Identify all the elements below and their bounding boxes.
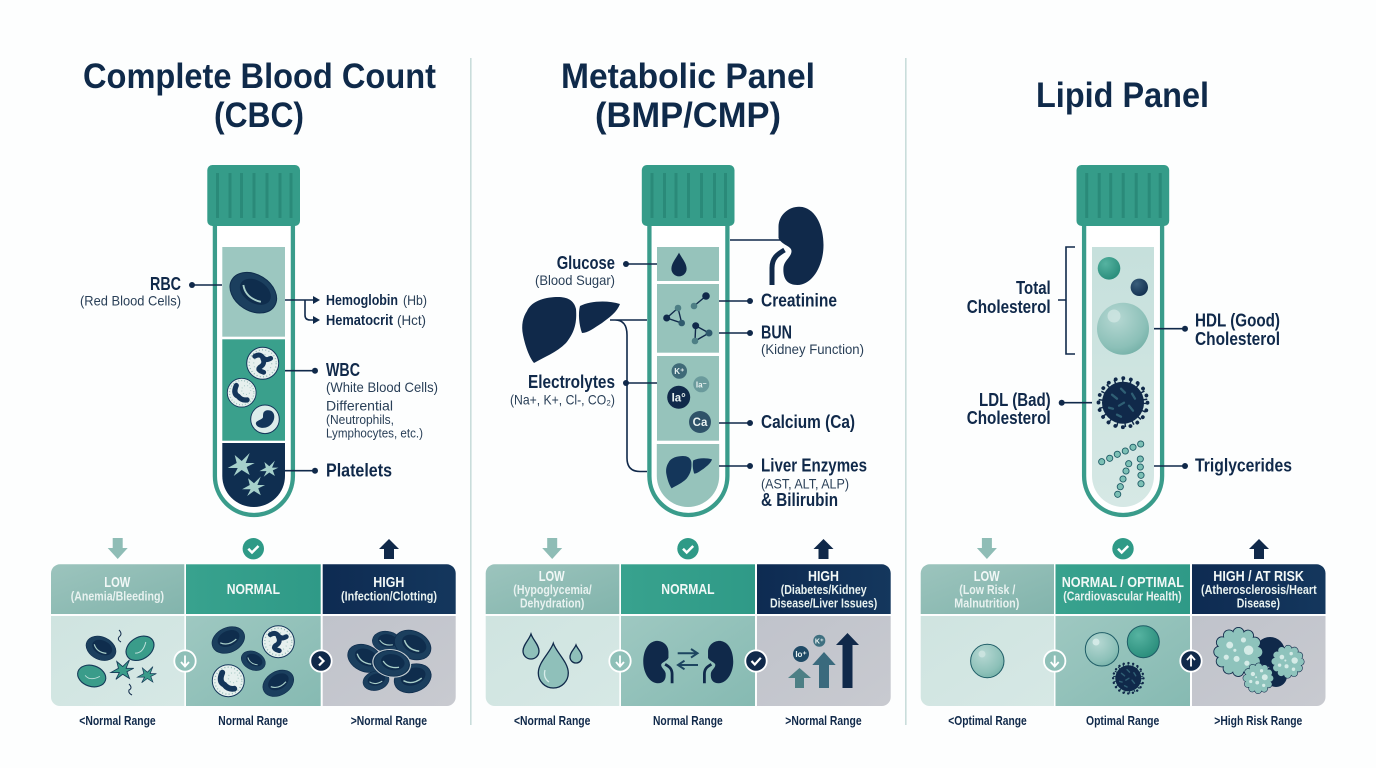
cell header: normal bbox=[186, 564, 321, 614]
cell: low illustration bbox=[486, 616, 619, 706]
cell: normal illustration bbox=[186, 616, 321, 706]
heading: metabolic panel: (BMP/CMP) bbox=[595, 96, 781, 135]
test tube: lipid bbox=[1076, 165, 1169, 515]
label: glucose bbox=[535, 253, 657, 288]
tube fill bbox=[1092, 247, 1154, 507]
label: WBC: WBC bbox=[326, 360, 360, 380]
organ connector lines bbox=[610, 240, 782, 472]
icon: kidney bbox=[772, 207, 824, 285]
connector: low to normal bbox=[1044, 650, 1065, 672]
cell header: normal bbox=[621, 564, 755, 614]
cell header: normal: (Cardiovascular Health) bbox=[1063, 590, 1182, 604]
label: WBC: Lymphocytes, etc.) bbox=[326, 426, 423, 440]
range labels: >High Risk Range bbox=[1214, 714, 1302, 728]
cell: high illustration: K⁺ bbox=[815, 638, 824, 645]
cell header: low bbox=[486, 564, 619, 614]
tube layer: electrolytes bbox=[657, 356, 719, 441]
connector: normal to high bbox=[1180, 650, 1202, 672]
label: hemoglobin and hematocrit with arrows bbox=[285, 292, 427, 329]
cell: high illustration: Io⁺ bbox=[795, 650, 807, 659]
status icon: normal check bbox=[243, 538, 264, 559]
status arrow: high bbox=[814, 539, 834, 559]
tube layer: white cells bbox=[222, 339, 285, 441]
cell: normal illustration bbox=[1056, 616, 1190, 706]
cell header: high: (Atherosclerosis/Heart bbox=[1201, 583, 1317, 597]
divider: left bbox=[470, 58, 472, 725]
connector: low to normal bbox=[609, 650, 631, 672]
cell header: high bbox=[1192, 564, 1326, 614]
cell header: high: HIGH / AT RISK bbox=[1213, 568, 1304, 585]
label: RBC: (Red Blood Cells) bbox=[80, 292, 181, 308]
label: glucose: Glucose bbox=[557, 253, 615, 273]
status arrow: high bbox=[379, 539, 399, 559]
label: hemoglobin and hematocrit with arrows: (Hct) bbox=[397, 312, 426, 328]
cell: normal illustration bbox=[621, 616, 755, 706]
label: BUN bbox=[719, 323, 864, 357]
label: HDL bbox=[1154, 311, 1280, 349]
test tube: metabolic bbox=[642, 165, 734, 515]
label: platelets: Platelets bbox=[326, 460, 392, 480]
range labels: <Normal Range bbox=[79, 714, 156, 728]
cell: high illustration bbox=[1192, 616, 1326, 706]
cell: high illustration bbox=[323, 616, 456, 706]
label: hemoglobin and hematocrit with arrows: Hematocrit bbox=[326, 312, 393, 329]
range labels: Normal Range bbox=[653, 714, 723, 728]
cell header: high bbox=[323, 564, 456, 614]
tube layer: glucose bbox=[657, 247, 719, 281]
label: liver enzymes bbox=[719, 456, 867, 510]
status icon: normal check bbox=[1112, 538, 1134, 559]
heading: complete blood count bbox=[83, 57, 436, 135]
cell: low illustration bbox=[51, 616, 184, 706]
label: creatinine bbox=[719, 291, 837, 311]
label: BUN: (Kidney Function) bbox=[761, 341, 864, 357]
cell header: low: (Hypoglycemia/ bbox=[513, 583, 592, 597]
status arrow: low bbox=[542, 538, 562, 559]
heading: metabolic panel: Metabolic Panel bbox=[561, 57, 815, 96]
cell header: low: LOW bbox=[974, 568, 1000, 585]
particle: LDL bbox=[1098, 378, 1148, 427]
label: triglycerides bbox=[1154, 456, 1292, 476]
tube layer: liver bbox=[657, 444, 719, 507]
label: LDL: Cholesterol bbox=[967, 408, 1051, 428]
status arrow: low bbox=[977, 538, 997, 559]
label: liver enzymes: & Bilirubin bbox=[761, 490, 838, 510]
status icon: normal check bbox=[677, 538, 699, 559]
cell header: normal bbox=[1056, 564, 1190, 614]
tube layer: electrolytes: Ia° bbox=[672, 392, 686, 404]
cell: low illustration bbox=[921, 616, 1054, 706]
heading: complete blood count: Complete Blood Count bbox=[83, 57, 436, 96]
label: total cholesterol: Total bbox=[1016, 278, 1051, 298]
label: calcium bbox=[719, 412, 855, 432]
particle: HDL sphere bbox=[1097, 303, 1149, 355]
heading: lipid panel: Lipid Panel bbox=[1036, 76, 1209, 115]
label: liver enzymes: (AST, ALT, ALP) bbox=[761, 476, 849, 492]
connector: normal to high bbox=[745, 650, 767, 672]
status arrow: high bbox=[1249, 539, 1269, 559]
cell header: low bbox=[51, 564, 184, 614]
heading: metabolic panel bbox=[561, 57, 815, 135]
tube layer: electrolytes: Ca bbox=[693, 417, 708, 429]
cell header: low: LOW bbox=[104, 574, 131, 591]
cell: high illustration bbox=[757, 616, 891, 706]
label: calcium: Calcium (Ca) bbox=[761, 412, 855, 432]
range labels: <Normal Range bbox=[514, 714, 590, 728]
connector: low to normal bbox=[174, 650, 196, 672]
cell header: high: HIGH bbox=[808, 568, 839, 585]
cell header: high bbox=[757, 564, 891, 614]
cell header: normal: NORMAL bbox=[227, 581, 280, 598]
cell header: high: (Infection/Clotting) bbox=[341, 590, 437, 604]
range labels bbox=[514, 714, 862, 728]
label: LDL bbox=[967, 390, 1092, 428]
cell header: low: (Anemia/Bleeding) bbox=[71, 590, 164, 604]
label: BUN: BUN bbox=[761, 323, 792, 343]
tube layer: molecules bbox=[657, 284, 719, 353]
cell header: low: Dehydration) bbox=[520, 597, 584, 611]
label: LDL: LDL (Bad) bbox=[979, 390, 1051, 410]
label: HDL: Cholesterol bbox=[1195, 329, 1280, 349]
tube layer: platelets bbox=[222, 443, 285, 507]
bracket: total cholesterol bbox=[1058, 247, 1075, 354]
tube layer: red cells bbox=[222, 247, 285, 337]
cell header: low: Malnutrition) bbox=[954, 597, 1019, 611]
particle: navy sphere bbox=[1131, 279, 1148, 296]
label: glucose: (Blood Sugar) bbox=[535, 272, 615, 288]
label: WBC: (Neutrophils, bbox=[326, 413, 394, 427]
label: WBC bbox=[285, 360, 438, 440]
range labels bbox=[79, 714, 427, 728]
range labels: Normal Range bbox=[218, 714, 288, 728]
label: WBC: Differential bbox=[326, 398, 393, 414]
label: electrolytes bbox=[510, 372, 657, 408]
tube layer: electrolytes: K⁺ bbox=[674, 367, 684, 376]
label: hemoglobin and hematocrit with arrows: Hemoglobin bbox=[326, 292, 398, 309]
test tube: CBC bbox=[207, 165, 300, 515]
label: WBC: (White Blood Cells) bbox=[326, 379, 438, 395]
panel: lipid panel bbox=[921, 76, 1326, 728]
label: HDL: HDL (Good) bbox=[1195, 311, 1280, 331]
cell header: high: (Diabetes/Kidney bbox=[781, 583, 867, 597]
label: hemoglobin and hematocrit with arrows: (Hb) bbox=[403, 292, 427, 308]
cell header: high: HIGH bbox=[373, 574, 404, 591]
label: platelets bbox=[285, 460, 392, 480]
icon: liver bbox=[522, 297, 620, 363]
panel: metabolic panel bbox=[486, 57, 891, 728]
label: total cholesterol: Cholesterol bbox=[967, 297, 1051, 317]
cell header: low: (Low Risk / bbox=[959, 583, 1016, 597]
cell header: normal: NORMAL / OPTIMAL bbox=[1062, 574, 1184, 591]
particle: triglyceride chains bbox=[1099, 441, 1144, 497]
divider: right bbox=[905, 58, 907, 725]
panel: complete blood count bbox=[51, 57, 456, 728]
cell header: normal: NORMAL bbox=[661, 581, 715, 598]
label: electrolytes: (Na+, K+, Cl-, CO₂) bbox=[510, 392, 615, 408]
label: total cholesterol bbox=[967, 278, 1051, 317]
heading: complete blood count: (CBC) bbox=[214, 96, 304, 135]
range labels bbox=[948, 714, 1302, 728]
cell header: high: Disease/Liver Issues) bbox=[770, 597, 877, 611]
label: RBC bbox=[80, 274, 222, 308]
label: electrolytes: Electrolytes bbox=[528, 372, 615, 392]
range labels: >Normal Range bbox=[785, 714, 862, 728]
cell header: high: Disease) bbox=[1237, 597, 1280, 611]
label: triglycerides: Triglycerides bbox=[1195, 456, 1292, 476]
label: creatinine: Creatinine bbox=[761, 291, 837, 311]
range labels: <Optimal Range bbox=[948, 714, 1027, 728]
label: liver enzymes: Liver Enzymes bbox=[761, 456, 867, 476]
cell header: low: LOW bbox=[539, 568, 565, 585]
range labels: >Normal Range bbox=[351, 714, 427, 728]
particle: teal sphere bbox=[1098, 257, 1120, 280]
connector: normal to high bbox=[310, 650, 332, 672]
status arrow: low bbox=[108, 538, 128, 559]
range labels: Optimal Range bbox=[1086, 714, 1159, 728]
tube layer: electrolytes: Ia⁻ bbox=[696, 380, 707, 389]
label: RBC: RBC bbox=[150, 274, 181, 294]
cell header: low bbox=[921, 564, 1054, 614]
